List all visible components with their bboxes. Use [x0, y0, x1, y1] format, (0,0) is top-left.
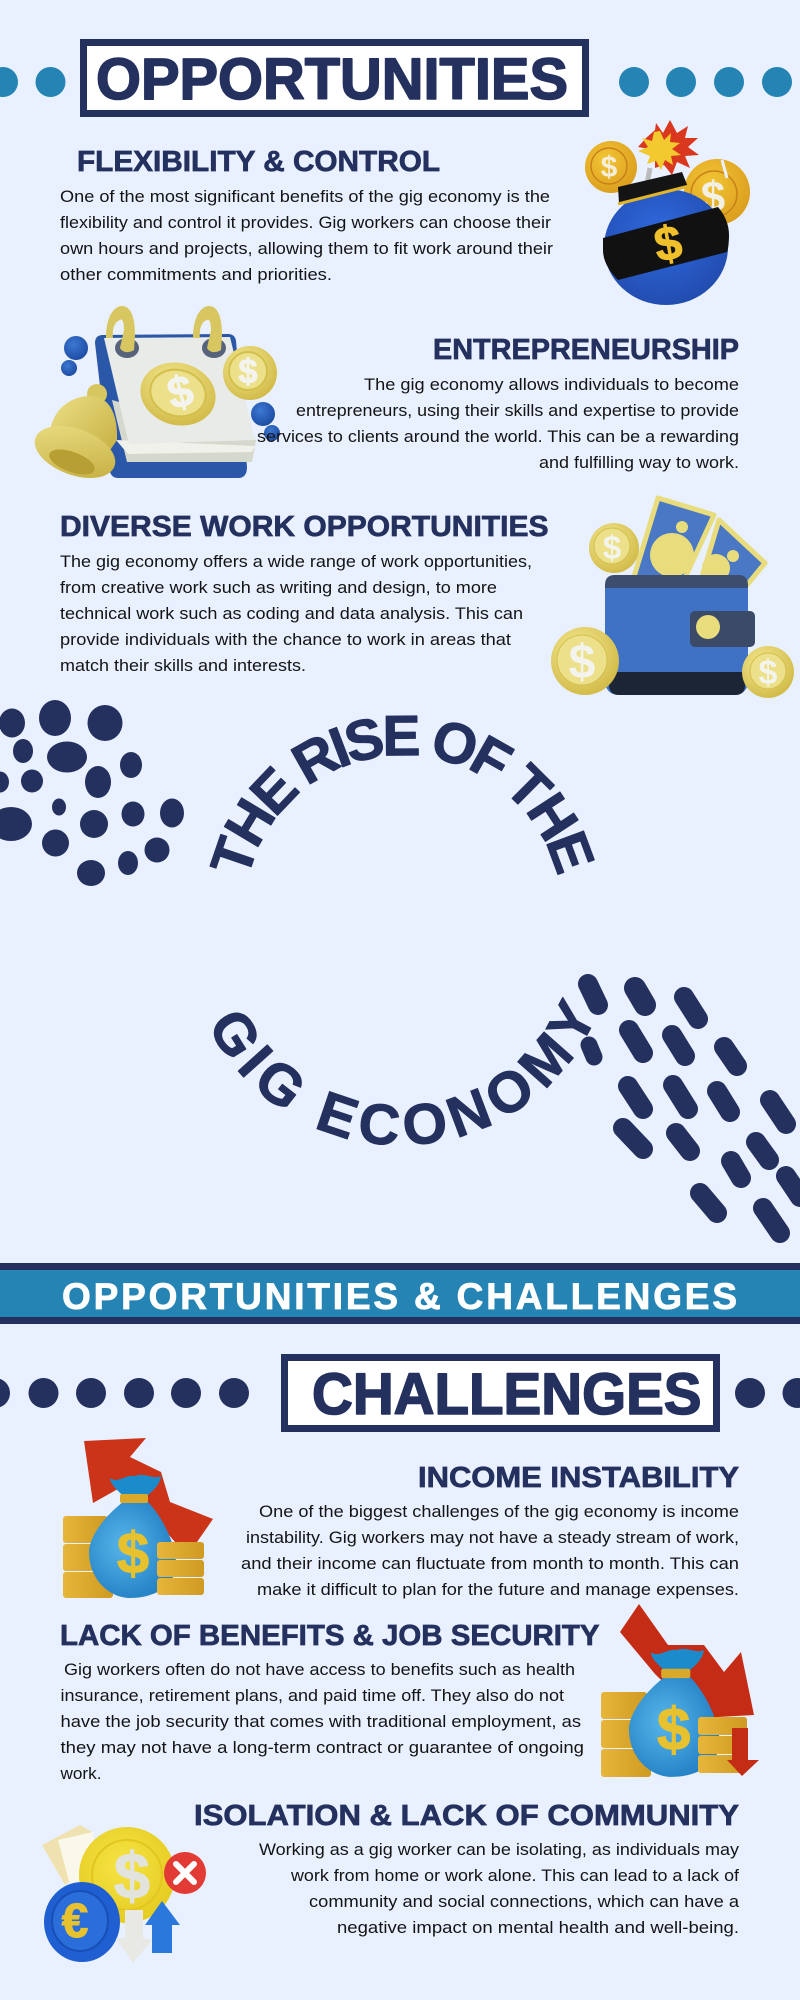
heading: isolation: ISOLATION & LACK OF COMMUNITY	[194, 1800, 739, 1832]
text block: lack of benefits: Gig workers often do not have access to benefits such as health	[64, 1660, 575, 1679]
text block: income instability: One of the biggest challenges of the gig economy is income	[259, 1502, 739, 1521]
heading: entrepreneurship: ENTREPRENEURSHIP	[433, 334, 739, 366]
dots: teal left	[0, 67, 66, 97]
title: challenges: CHALLENGES	[312, 1362, 702, 1427]
text block: lack of benefits	[59, 1660, 584, 1783]
text block: entrepreneurship: entrepreneurs, using their skills and expertise to provide	[296, 401, 739, 420]
icon: calendar with coins and bell	[28, 306, 280, 488]
icon: money bag with up arrow	[63, 1438, 213, 1598]
text block: diverse work: The gig economy offers a wide range of work opportunities,	[60, 552, 532, 571]
text block: diverse work: technical work such as coding and data analysis. This can	[60, 604, 523, 623]
title box: challenges	[284, 1358, 716, 1428]
icon: bomb with coins: $	[601, 151, 618, 184]
icon: bomb with coins: $	[651, 216, 686, 273]
text block: income instability: and their income can fluctuate from month to month. This can	[241, 1554, 739, 1573]
text block: diverse work: provide individuals with the chance to work in areas that	[60, 630, 511, 649]
text block: flexibility: flexibility and control it provides. Gig workers can choose their	[60, 213, 551, 232]
text block: income instability: make it difficult to plan for the future and manage expenses.	[257, 1580, 739, 1599]
icon: currency coins with arrows	[42, 1825, 206, 1963]
text block: lack of benefits: insurance, retirement plans, and paid time off. They also do not	[60, 1686, 564, 1705]
text block: diverse work	[60, 552, 532, 675]
panel: isolation and lack of community	[42, 1800, 740, 1963]
icon: bomb with coins: $	[701, 173, 725, 222]
text block: lack of benefits: they may not have a long-term contract or guarantee of ongoing	[60, 1738, 584, 1757]
icon: wallet with cash and coins: $	[603, 529, 621, 566]
title: opportunities: OPPORTUNITIES	[96, 47, 568, 112]
heading: lack of benefits: LACK OF BENEFITS & JOB SECURITY	[60, 1620, 600, 1652]
text block: diverse work: match their skills and interests.	[60, 656, 306, 675]
title box: opportunities	[84, 42, 586, 114]
decorative blobs: left cluster	[0, 700, 184, 886]
challenges header row	[0, 1358, 800, 1428]
panel: flexibility and control	[60, 120, 750, 305]
banner: opportunities and challenges	[0, 1263, 800, 1324]
heading: flexibility: FLEXIBILITY & CONTROL	[77, 146, 440, 178]
icon: currency coins with arrows: $	[114, 1839, 150, 1912]
panel: diverse work opportunities	[60, 498, 794, 698]
curved title: gig economy: GIG ECONOMY	[214, 996, 592, 1145]
text block: entrepreneurship: The gig economy allows individuals to become	[364, 375, 739, 394]
icon: wallet with cash and coins: $	[759, 654, 778, 692]
text block: entrepreneurship: and fulfilling way to work.	[539, 453, 739, 472]
text block: flexibility	[60, 187, 553, 284]
dots: teal right	[619, 67, 792, 97]
text block: flexibility: other commitments and priorities.	[60, 265, 332, 284]
decorative strokes: right cluster	[588, 984, 800, 1233]
opportunities header row	[0, 42, 792, 114]
text block: isolation: work from home or work alone. This can lead to a lack of	[290, 1866, 739, 1885]
text block: isolation: community and social connections, which can have a	[309, 1892, 740, 1911]
text block: income instability	[241, 1502, 739, 1599]
panel: lack of benefits and job security	[59, 1604, 759, 1783]
text block: lack of benefits: have the job security that comes with traditional employment, as	[60, 1712, 581, 1731]
text block: isolation: negative impact on mental health and well-being.	[337, 1918, 739, 1937]
dots: navy left	[0, 1378, 249, 1408]
text block: isolation	[259, 1840, 740, 1937]
curved title: the rise of the: THE RISE OF THE	[210, 715, 595, 876]
text block: entrepreneurship: services to clients around the world. This can be a rewarding	[257, 427, 739, 446]
text block: entrepreneurship	[257, 375, 739, 472]
icon: bomb with coins	[585, 120, 750, 305]
text block: isolation: Working as a gig worker can be isolating, as individuals may	[259, 1840, 740, 1859]
heading: income instability: INCOME INSTABILITY	[418, 1462, 739, 1494]
text block: flexibility: own hours and projects, allowing them to fit work around their	[60, 239, 553, 258]
panel: income instability	[63, 1438, 739, 1599]
icon: money bag with down arrow	[601, 1604, 759, 1777]
panel: entrepreneurship	[28, 306, 739, 488]
icon: currency coins with arrows: €	[62, 1895, 88, 1948]
icon: wallet with cash and coins	[551, 498, 794, 698]
heading: diverse work: DIVERSE WORK OPPORTUNITIES	[60, 511, 548, 543]
text block: lack of benefits: work.	[59, 1764, 102, 1783]
icon: calendar with coins and bell: $	[239, 353, 258, 391]
icon: wallet with cash and coins: $	[569, 636, 596, 689]
dots: navy right	[735, 1378, 800, 1408]
icon: money bag with down arrow: $	[657, 1695, 690, 1763]
icon: money bag with up arrow: $	[117, 1521, 149, 1586]
banner text: OPPORTUNITIES & CHALLENGES	[62, 1276, 737, 1317]
text block: diverse work: from creative work such as writing and design, to more	[60, 578, 497, 597]
icon: calendar with coins and bell: $	[163, 366, 198, 419]
text block: income instability: instability. Gig workers may not have a steady stream of work,	[246, 1528, 739, 1547]
text block: flexibility: One of the most significant benefits of the gig economy is the	[60, 187, 550, 206]
